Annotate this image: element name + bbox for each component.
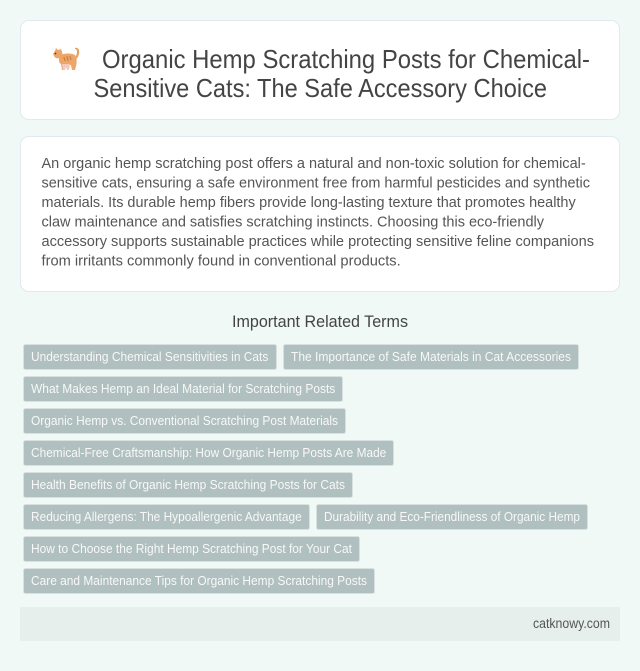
tag: Chemical-Free Craftsmanship: How Organic Hemp Posts Are Made xyxy=(31,445,386,460)
tag: Health Benefits of Organic Hemp Scratching Posts for Cats xyxy=(31,477,345,492)
tag xyxy=(24,568,374,594)
tag: Understanding Chemical Sensitivities in Cats xyxy=(31,349,268,364)
tag: Organic Hemp vs. Conventional Scratching Post Materials xyxy=(31,413,338,428)
tag xyxy=(24,504,310,530)
tag: The Importance of Safe Materials in Cat Accessories xyxy=(291,349,571,364)
tag xyxy=(284,344,578,370)
panel: summary paragraph xyxy=(20,136,620,292)
title: Organic Hemp Scratching Posts for Chemical- xyxy=(102,46,590,74)
tag: What Makes Hemp an Ideal Material for Scratching Posts xyxy=(31,381,335,396)
tag xyxy=(24,536,360,562)
tag xyxy=(24,408,346,434)
heading: related terms: Important Related Terms xyxy=(232,313,408,331)
title xyxy=(94,46,590,103)
footer: catknowy.com xyxy=(533,616,610,631)
icon: orange cat xyxy=(53,48,79,70)
tag: Durability and Eco-Friendliness of Organic Hemp xyxy=(324,509,580,524)
footer xyxy=(20,607,620,641)
panel: summary paragraph: sensitive cats, ensuring a safe environment free from harmful pesticides and synthetic xyxy=(42,174,590,192)
panel: summary paragraph: claw maintenance and satisfies scratching instincts. Choosing this eco-friendly xyxy=(42,214,544,230)
tag: Reducing Allergens: The Hypoallergenic Advantage xyxy=(31,509,302,524)
tag xyxy=(24,344,276,370)
title: Sensitive Cats: The Safe Accessory Choice xyxy=(94,75,547,103)
tag xyxy=(24,376,342,402)
panel: summary paragraph: An organic hemp scratching post offers a natural and non-toxic solution for chemical- xyxy=(42,155,586,172)
panel: title card xyxy=(20,20,620,120)
panel: summary paragraph: from irritants commonly found in conventional products. xyxy=(42,252,401,270)
tag xyxy=(316,504,588,530)
tag xyxy=(24,472,352,498)
panel: summary paragraph: materials. Its durable hemp fibers provide long-lasting texture that promotes healthy xyxy=(42,194,576,211)
tag: How to Choose the Right Hemp Scratching Post for Your Cat xyxy=(31,541,352,556)
tag: Care and Maintenance Tips for Organic Hemp Scratching Posts xyxy=(31,573,367,588)
panel: summary paragraph: accessory supports sustainable practices while protecting sensitive feline companions xyxy=(42,233,594,250)
tag xyxy=(24,440,394,466)
tag list xyxy=(24,344,588,594)
